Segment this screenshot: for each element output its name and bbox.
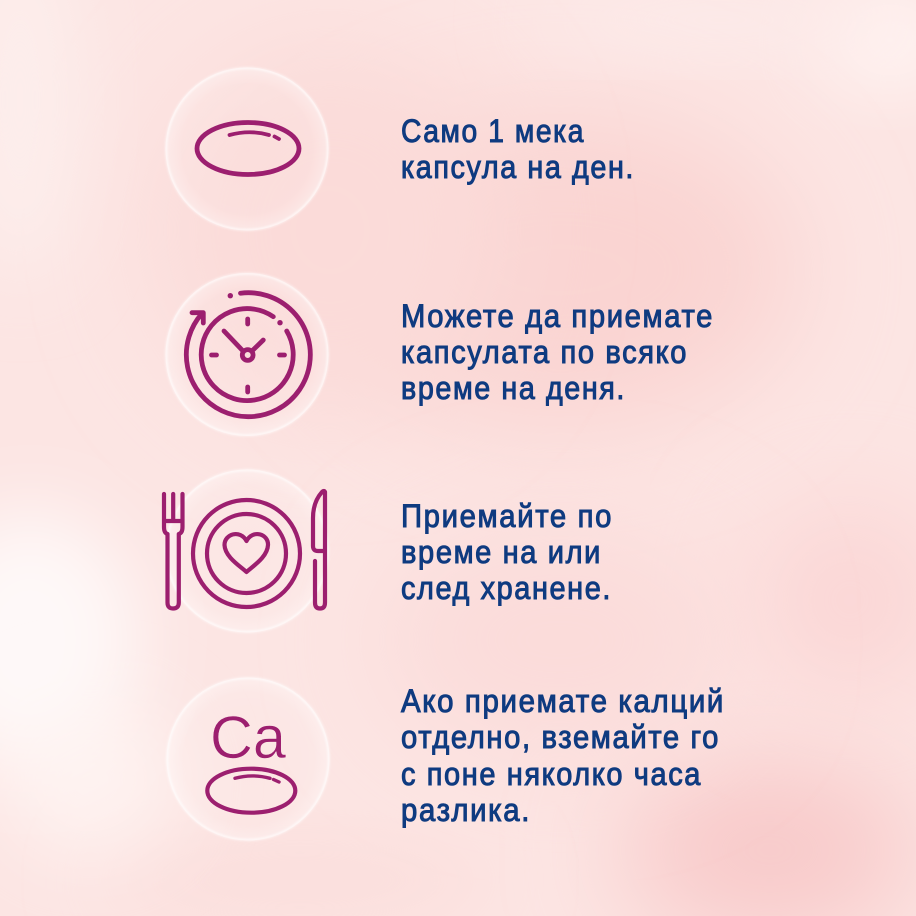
item 1: capsule icon — [166, 68, 328, 230]
item 2: text: време на деня. — [401, 370, 626, 406]
item 4: text: с поне няколко часа — [401, 756, 702, 792]
item 1: text: капсула на ден. — [401, 149, 635, 185]
item 2: clock icon — [166, 273, 328, 436]
item 3: text: след хранене. — [401, 570, 612, 606]
item 4: calcium and capsule icon — [166, 678, 330, 840]
item 4: text — [401, 683, 725, 828]
item 3: text: време на или — [401, 534, 602, 570]
item 2: text: капсулата по всяко — [401, 334, 688, 370]
item 1: text: Само 1 мека — [401, 113, 585, 149]
item 4: text: Ако приемате калций — [401, 683, 725, 719]
item 4: text: разлика. — [401, 792, 531, 828]
item 1: text — [401, 113, 635, 185]
item 3: plate and cutlery icon — [164, 470, 328, 632]
item 2: text — [401, 298, 714, 406]
item 3: text — [401, 498, 613, 606]
item 4: calcium and capsule icon: Ca — [210, 704, 287, 771]
item 2: text: Можете да приемате — [401, 298, 714, 334]
item 3: text: Приемайте по — [401, 498, 613, 534]
item 4: text: отделно, вземайте го — [401, 719, 720, 755]
